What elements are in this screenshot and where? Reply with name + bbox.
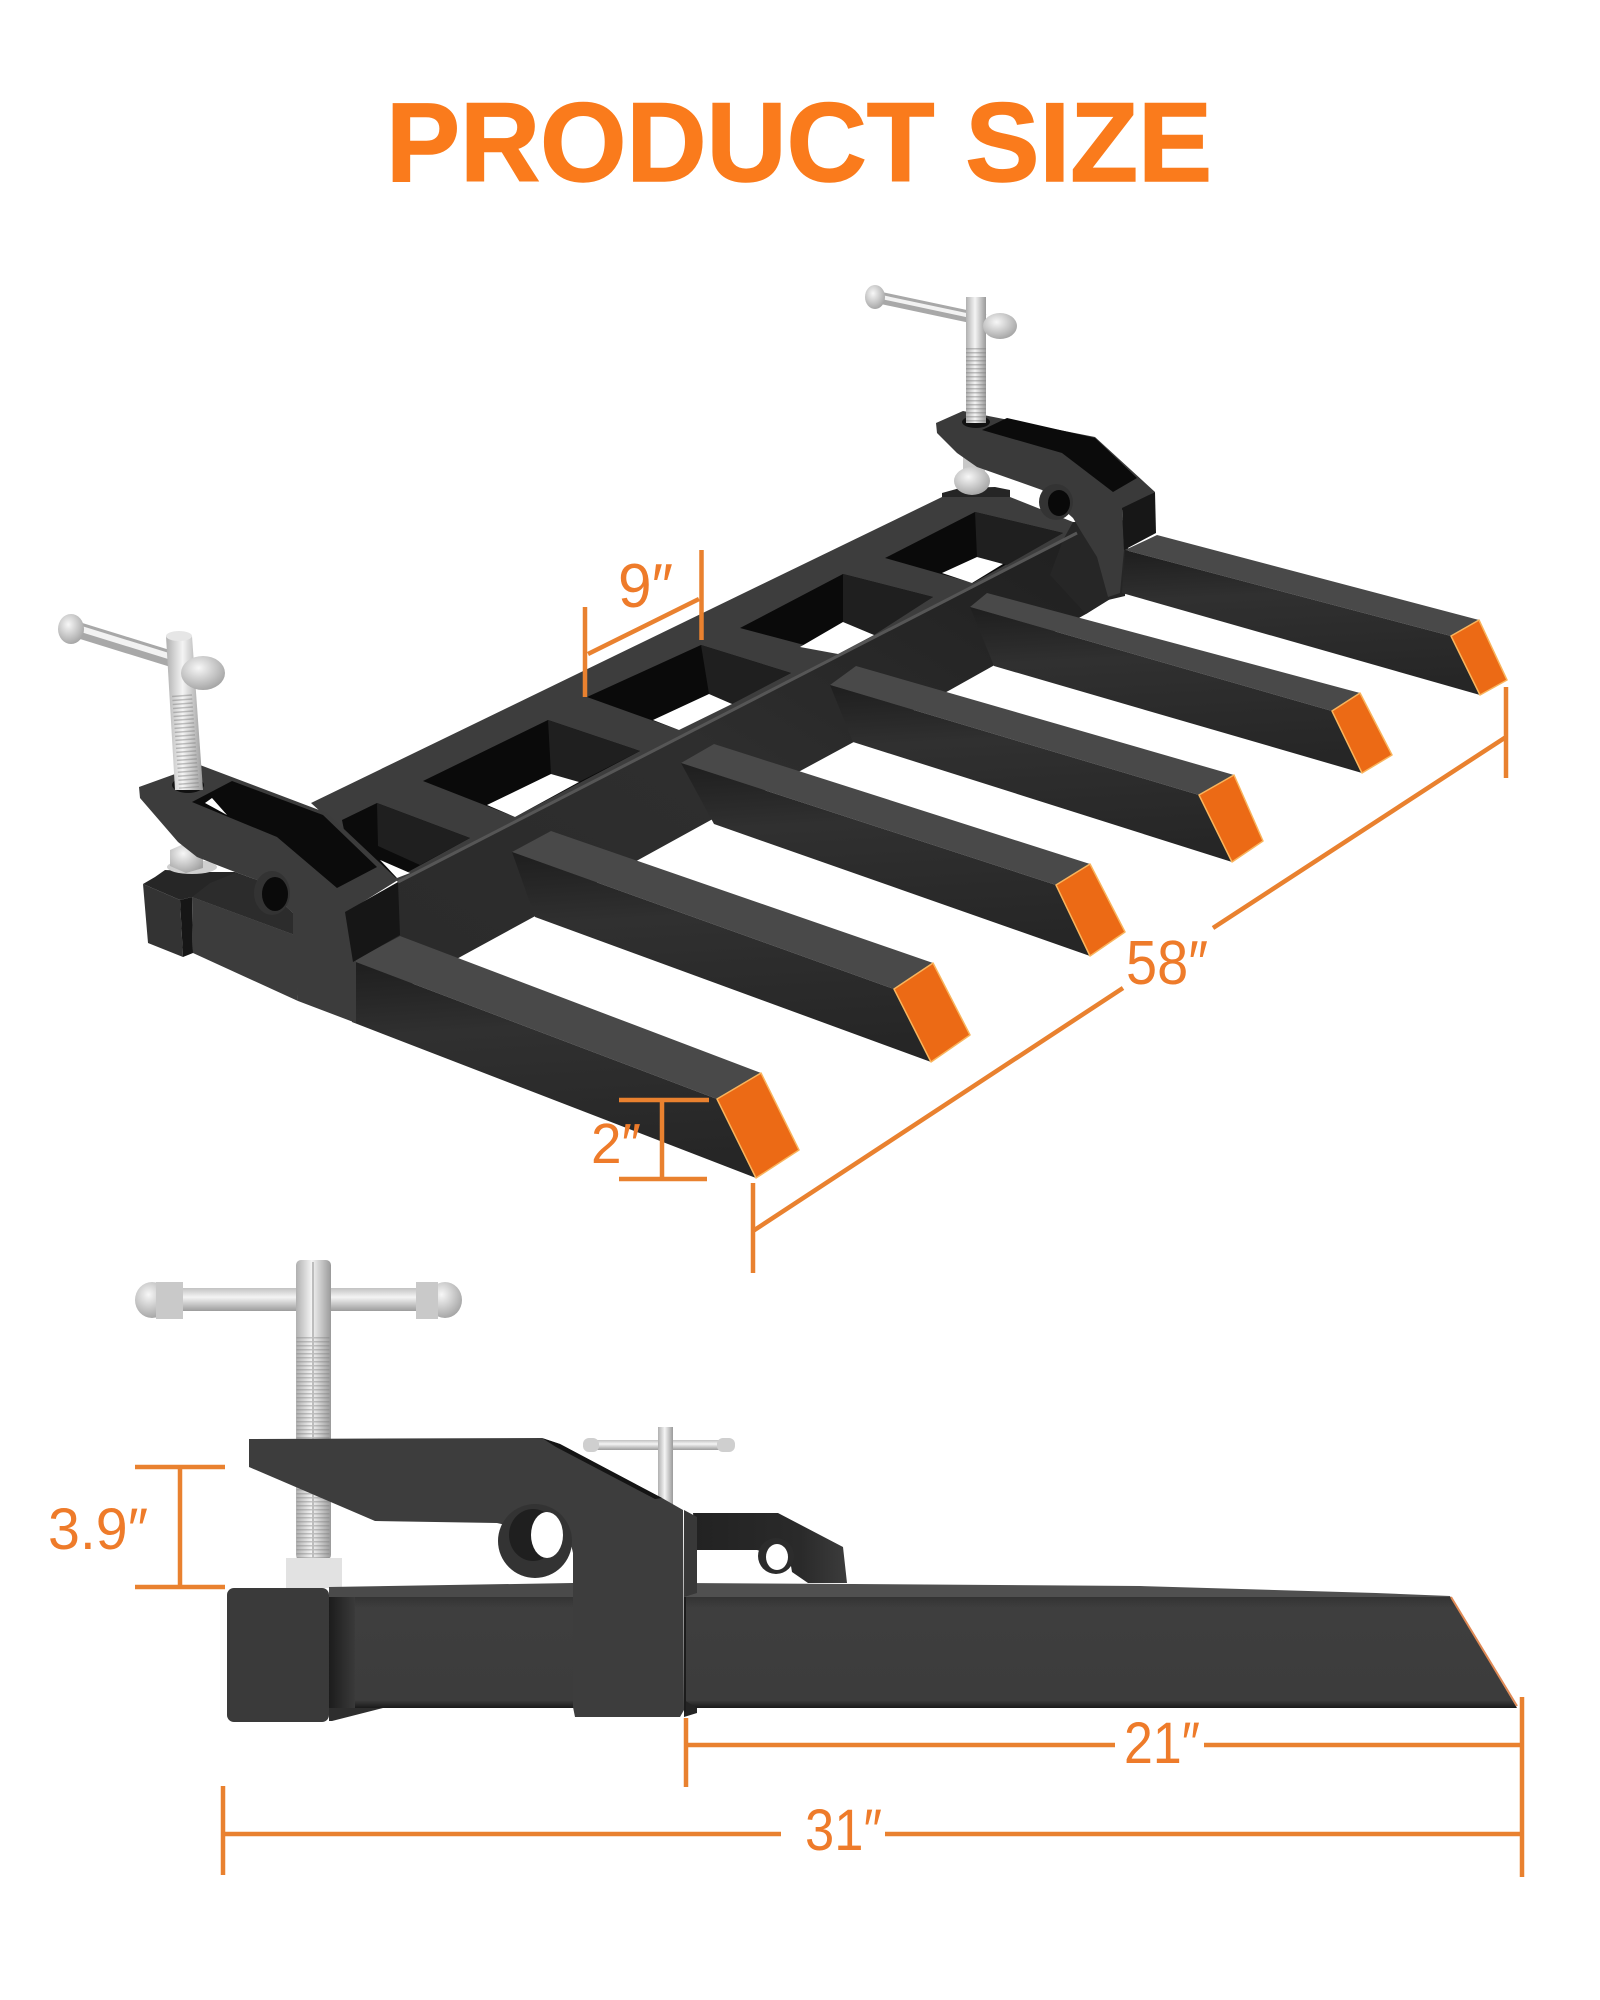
tine 2 with orange tip [970,593,1392,773]
dimension: 3.9 inch height: 3.9″ [48,1497,148,1562]
side view of clamp-on fork [135,1260,1517,1722]
rear small T-bolt [583,1427,735,1505]
title: PRODUCT SIZE [386,80,1212,205]
left clamp plate [139,765,400,1023]
dimension: 3.9 inch height [48,1467,225,1587]
front clamp plate with pin hole [249,1438,697,1717]
dimension: 9 inch spacing [585,550,702,697]
frame openings [342,512,1063,878]
tine 1 (rear) with orange tip [1122,535,1507,695]
right gusset [1050,520,1130,614]
frame top surface [311,497,1077,882]
left T-bolt [58,614,225,793]
dimension: 31 inch overall length: 31″ [805,1798,882,1863]
tine 3 with orange tip [830,666,1263,862]
right T-bolt [865,285,1017,428]
right lower nut [954,452,990,495]
perspective view of clamp-on fork frame [58,285,1507,1178]
dimension: 2 inch height: 2″ [591,1112,641,1176]
tine 5 with orange tip [512,831,970,1062]
left lower nut [167,843,217,874]
tine 6 (front) with orange tip [352,936,799,1178]
dimension: 21 inch tine length [686,1711,1522,1787]
right clamp plate [936,411,1156,597]
tine 4 with orange tip [681,744,1125,956]
beam ridge highlight [398,533,1077,882]
fork beam and tine [227,1583,1517,1722]
frame front beam [352,533,1120,1018]
dimension: 31 inch overall length [223,1697,1522,1877]
rear clamp silhouette [693,1513,847,1583]
dimension: 2 inch height [591,1100,709,1179]
dimension: 58 inch width: 58″ [1126,929,1208,998]
left hitch sleeve [143,870,298,1001]
dimension: 9 inch spacing: 9″ [618,552,673,621]
rear mounting lug [942,487,1010,497]
dimension: 58 inch width [753,687,1506,1273]
dimension: 21 inch tine length: 21″ [1124,1711,1200,1776]
large T-bolt [135,1260,462,1588]
